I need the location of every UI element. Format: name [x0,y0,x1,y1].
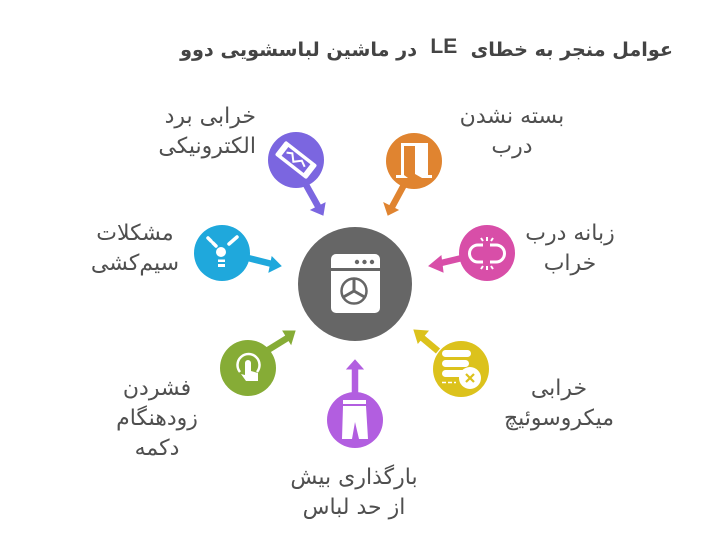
icon: circuit board [275,141,317,179]
icon: hand tap [238,354,260,381]
label: door not closing: بسته نشدن [460,104,564,129]
spoke: wiring (blue) [194,225,281,281]
label: microswitch [504,376,614,431]
icon: trousers [342,400,368,439]
spoke: early button press (green) [220,331,295,396]
title: عوامل منجر به خطای LE در ماشین لباسشویی دوو [180,35,673,61]
label: microswitch: خرابی [531,376,587,401]
label: door not closing [460,104,564,159]
icon: broken chain link [470,237,504,270]
spoke: overloading (purple) [327,360,383,448]
label: early button press: زودهنگام [116,406,198,431]
label: overloading: از حد لباس [303,495,405,520]
label: early button press: فشردن [123,376,191,401]
spoke: microswitch (yellow) [414,330,489,397]
label: wiring: سیم‌کشی [91,251,179,276]
label: overloading: بارگذاری بیش [290,465,418,490]
label: early button press: دکمه [135,436,179,461]
spoke: door latch (pink) [429,225,515,281]
label: wiring [91,221,179,276]
spoke: door not closing (orange) [384,133,442,215]
label: electronic board [158,104,256,159]
label: electronic board: الکترونیکی [158,134,256,159]
label: overloading [290,464,418,520]
icon: open door [396,143,432,178]
label: door latch [525,221,615,276]
label: door not closing: درب [491,134,533,159]
icon: network wiring [208,237,237,267]
icon: server with x [442,350,481,389]
label: microswitch: میکروسوئیچ [504,406,614,431]
label: early button press [116,376,198,461]
label: wiring: مشکلات [96,221,174,246]
spoke: electronic board (violet) [268,132,325,215]
central washing machine hub [298,227,412,341]
label: electronic board: خرابی برد [165,104,256,129]
label: door latch: زبانه درب [525,221,615,246]
icon: washing machine [331,254,380,313]
label: door latch: خراب [544,251,596,276]
